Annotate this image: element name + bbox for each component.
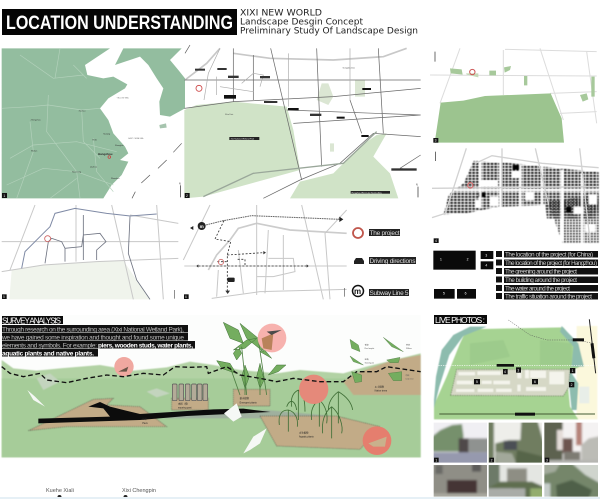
panel: survey analysis illustration: Sweetgum bbox=[365, 362, 374, 365]
panel: survey analysis illustration: Emergent plants bbox=[240, 401, 257, 404]
panel: survey analysis illustration: 香樟 bbox=[365, 342, 369, 346]
panel: survey analysis illustration: Willow bbox=[406, 348, 412, 350]
icon: north arrow map 1 bbox=[179, 183, 181, 197]
panel: map 1 China coast: YELLOW SEA bbox=[117, 97, 129, 100]
white egrets bbox=[27, 390, 267, 453]
icon: car marker bbox=[227, 278, 235, 282]
icon: north arrow map 1: N bbox=[179, 183, 181, 185]
panel: survey analysis illustration: 乡土植物 bbox=[375, 384, 385, 388]
panel: map 1 China coast: Wenzhou bbox=[111, 178, 119, 180]
panel: map 1 China coast: Nanjing bbox=[103, 134, 110, 136]
badge 2: 2 bbox=[186, 194, 188, 198]
panel: map 6 traffic bbox=[183, 205, 347, 299]
panel: map 2 Hangzhou area: Gongshu Dist. bbox=[343, 67, 356, 70]
panel: survey analysis illustration: Piers bbox=[142, 422, 148, 425]
panel: survey analysis illustration: 木桩（驿） bbox=[178, 401, 190, 405]
badge 3 bbox=[433, 138, 438, 143]
badge 6 bbox=[184, 294, 189, 299]
bottom cut-off labels bbox=[0, 488, 600, 499]
badge photo 1: 1 bbox=[435, 458, 437, 462]
pier shadow bbox=[38, 402, 271, 423]
heading and survey text bbox=[1, 316, 195, 358]
legend: subway line 5 bbox=[352, 286, 409, 297]
panel: map 1 China coast: Wuhan bbox=[31, 151, 37, 153]
legend key blocks bbox=[433, 251, 493, 299]
icon: subway marker bbox=[198, 222, 206, 230]
panel: survey analysis illustration: 水生植物 bbox=[299, 430, 309, 434]
legend: driving directions bbox=[354, 257, 416, 265]
icon: north arrow map 2: N bbox=[416, 184, 418, 186]
photo 4 bbox=[434, 465, 487, 497]
heading and survey text: Through research on the surrounding area (Xixi National Wetland Park), bbox=[2, 326, 184, 334]
panel: map 2 Hangzhou area: Xihu Dist. bbox=[225, 113, 234, 116]
panel: survey analysis illustration: 乌桕 bbox=[405, 373, 409, 377]
photo 3 bbox=[542, 420, 600, 465]
photo 6 bbox=[544, 465, 598, 497]
panel: map 1 China coast: Zhengzhou bbox=[31, 120, 41, 122]
badge 4 bbox=[434, 238, 439, 243]
leaves bbox=[350, 337, 403, 383]
panel: survey analysis illustration: mooring post bbox=[178, 407, 192, 410]
panel: survey analysis illustration: Native trees bbox=[375, 389, 388, 392]
heading and survey text: elements and symbols. For example: piers, wooden studs, water plants, bbox=[2, 342, 193, 350]
badge 1: 1 bbox=[3, 194, 5, 198]
panel: survey analysis illustration bbox=[2, 315, 421, 457]
panel: site plan: 2 bbox=[571, 383, 573, 387]
legend key blocks: 1 bbox=[440, 258, 442, 262]
legend key blocks: 4 bbox=[485, 264, 487, 268]
panel: survey analysis illustration: 枫杨 bbox=[365, 357, 369, 361]
heading and survey text: SURVEY ANALYSIS bbox=[2, 316, 61, 326]
subtitle block: Preliminary Study Of Landscape Design bbox=[240, 26, 418, 36]
panel: survey analysis illustration: Red maple bbox=[365, 348, 375, 350]
legend: driving directions: Driving directions bbox=[370, 258, 416, 265]
badge photo 2: 2 bbox=[491, 458, 493, 462]
panel: survey analysis illustration: Crab tree bbox=[405, 378, 414, 381]
aquatic plants bbox=[279, 390, 353, 438]
panel: map 1 China coast: Shanghai bbox=[115, 145, 124, 147]
legend key blocks: 3 bbox=[485, 254, 487, 258]
legend: the project: The project bbox=[370, 230, 400, 237]
legend list: The location of the project (for Hangzhou) bbox=[505, 260, 597, 267]
badge 2 bbox=[185, 193, 190, 198]
legend: subway line 5: m bbox=[354, 287, 361, 296]
legend: subway line 5: Subway Line 5 bbox=[370, 290, 409, 297]
legend list: The greening around the project bbox=[505, 268, 577, 276]
legend list: The traffic situation around the project bbox=[505, 294, 592, 300]
panel: map 1 China coast bbox=[2, 45, 190, 198]
panel: site plan: 6 bbox=[534, 380, 536, 384]
panel: site plan: 5 bbox=[476, 380, 478, 384]
title: LOCATION UNDERSTANDING bbox=[6, 12, 233, 34]
legend list bbox=[496, 251, 598, 300]
legend list: The water around the project bbox=[505, 286, 570, 292]
badge 5: 5 bbox=[3, 295, 5, 299]
legend list: The location of the project (for China) bbox=[505, 252, 593, 258]
panel: map 2 Hangzhou area: Xixi National Wetland Park bbox=[231, 137, 254, 140]
bottom cut-off labels: Kuehe Xiali bbox=[46, 488, 74, 494]
panel: map 2 Hangzhou area: Hangzhou West Lake Scenic Area bbox=[352, 191, 383, 194]
panel: map 4 building footprints bbox=[432, 148, 599, 243]
photo 2 bbox=[487, 420, 544, 465]
panel: map 3 greening bbox=[430, 48, 597, 143]
panel: survey analysis illustration: Aquatic plants bbox=[299, 436, 314, 439]
bottom cut-off labels: Xixi Chengpin bbox=[122, 488, 156, 494]
photo 5 bbox=[488, 465, 542, 497]
badge 5 bbox=[2, 294, 7, 299]
panel: site plan: 3 bbox=[517, 368, 519, 372]
panel: map 1 China coast: Quzhou bbox=[90, 167, 97, 169]
panel: map 1 China coast: EAST CHINA SEA bbox=[128, 137, 144, 140]
badge 4: 4 bbox=[435, 239, 437, 243]
badge 6: 6 bbox=[185, 295, 187, 299]
heading and survey text: we have gained some inspiration and thought and found some unique bbox=[1, 334, 184, 342]
subtitle block: Landscape Desgin Concept bbox=[240, 18, 363, 28]
legend: the project bbox=[353, 228, 400, 238]
badge 1 bbox=[2, 193, 7, 198]
heading: live photos: LIVE PHOTOS : bbox=[435, 315, 485, 325]
icon: subway marker: m bbox=[200, 224, 204, 229]
wooden studs bbox=[172, 384, 208, 401]
subtitle block: XIXI NEW WORLD bbox=[240, 8, 322, 18]
icon: north arrow map 2 bbox=[416, 184, 418, 197]
legend key blocks: 2 bbox=[467, 258, 469, 262]
panel: site plan: 4 bbox=[504, 370, 506, 374]
panel: map 1 China coast: Xuzhou bbox=[79, 111, 85, 113]
water plants bbox=[217, 322, 286, 388]
panel: survey analysis illustration: 栈桥 bbox=[142, 416, 148, 420]
heading and survey text: aquatic plants and native plants. bbox=[2, 350, 94, 358]
badge photo 3: 3 bbox=[546, 458, 548, 462]
badge 3: 3 bbox=[435, 139, 437, 143]
legend key blocks: 5 bbox=[443, 292, 445, 296]
panel: site plan: 1 bbox=[572, 369, 574, 373]
panel: survey analysis illustration: 柳树 bbox=[406, 342, 410, 346]
panel: site plan bbox=[434, 319, 597, 419]
photo 1 bbox=[432, 420, 489, 466]
panel: map 5 water bbox=[2, 205, 178, 299]
subtitle block bbox=[240, 8, 418, 36]
panel: map 1 China coast: Hefei bbox=[92, 139, 98, 141]
legend list: The building around the project bbox=[505, 277, 577, 284]
callout circles bbox=[114, 324, 391, 455]
panel: map 1 China coast: Nanchang bbox=[72, 172, 81, 174]
panel: survey analysis illustration: 挺水植物 bbox=[240, 396, 250, 400]
legend key blocks: 6 bbox=[465, 292, 467, 296]
panel: map 2 Hangzhou area bbox=[184, 48, 421, 198]
panel: map 1 China coast: Hangzhou bbox=[98, 152, 113, 156]
